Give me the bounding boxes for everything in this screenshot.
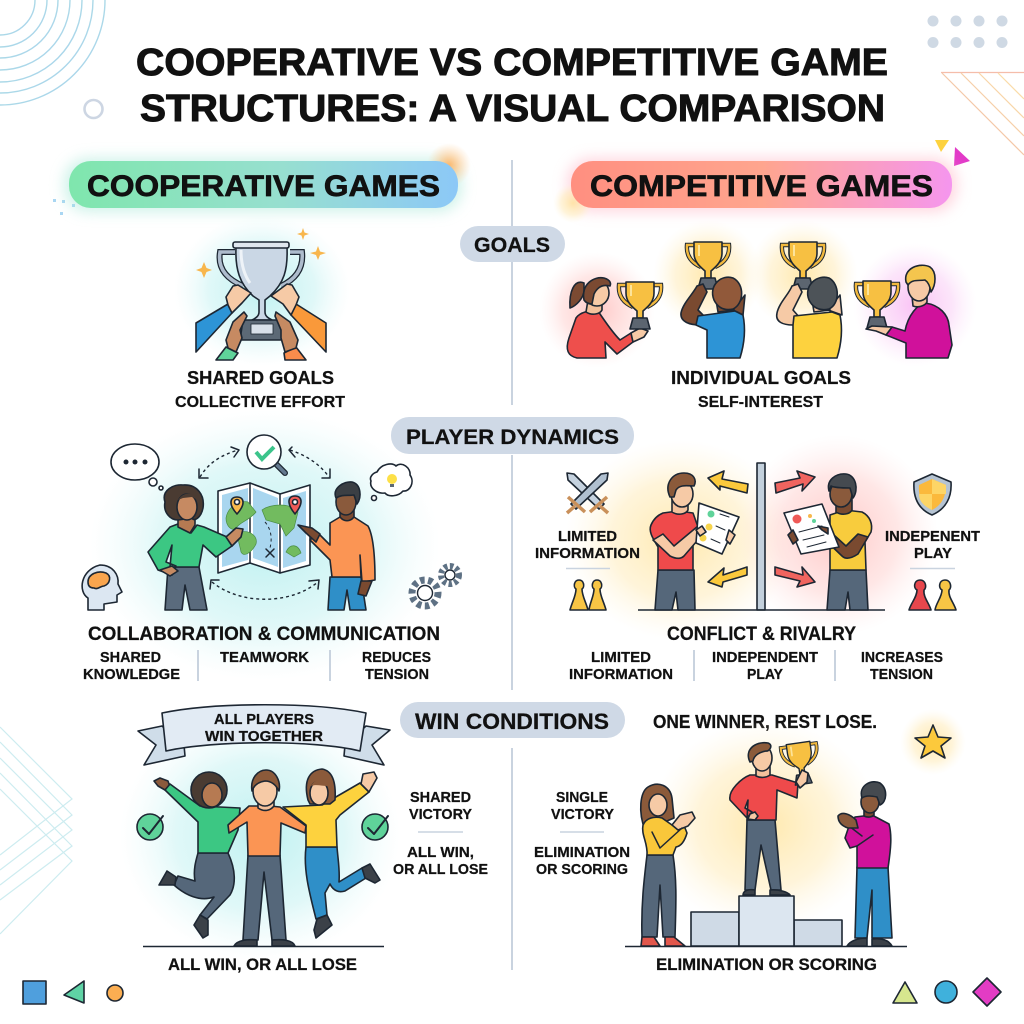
decoration: small triangles bbox=[935, 140, 970, 166]
figure: blond man in magenta with trophy bbox=[856, 265, 952, 358]
icon: star bbox=[900, 709, 966, 775]
icon: right check bbox=[362, 814, 388, 840]
pill: player dynamics: PLAYER DYNAMICS bbox=[406, 426, 619, 449]
text: independent play: INDEPENDENT bbox=[712, 649, 818, 666]
text: individual goals: SELF-INTEREST bbox=[698, 394, 823, 411]
podium bbox=[691, 896, 842, 946]
text: elimination or scoring: ELIMINATION OR SCORING bbox=[656, 956, 877, 974]
arrows: conflict bbox=[708, 471, 815, 587]
figure: left jumping woman bbox=[154, 772, 240, 938]
heading: cooperative games: COOPERATIVE GAMES bbox=[87, 170, 440, 203]
icon: speech bubble bbox=[111, 444, 163, 490]
text: all win or all lose: ALL WIN, OR ALL LOSE bbox=[168, 956, 357, 974]
icon: raised trophy bbox=[780, 741, 822, 786]
icon: yellow pawns bbox=[570, 580, 606, 610]
heading: competitive games: COMPETITIVE GAMES bbox=[590, 170, 933, 203]
text: side labels limited information bbox=[535, 528, 640, 568]
illustration: conflict bbox=[565, 435, 956, 640]
text: limited information bbox=[569, 649, 673, 683]
text: collaboration & communication: COLLABORATION & COMMUNICATION bbox=[88, 624, 440, 645]
heading: cooperative games bbox=[64, 143, 471, 212]
icon: left check bbox=[137, 814, 163, 840]
banner bbox=[138, 705, 390, 765]
text: single victory side labels: VICTORY bbox=[551, 806, 614, 823]
heading: competitive games bbox=[553, 158, 957, 223]
decoration: diagonal lines bbox=[941, 72, 1024, 155]
illustration: individual goals bbox=[539, 220, 977, 368]
text: conflict & rivalry bbox=[569, 624, 943, 683]
text: shared victory side labels: ALL WIN, bbox=[407, 844, 474, 861]
text: reduces tension: REDUCES bbox=[362, 649, 431, 666]
figure: clapping man bbox=[838, 782, 892, 946]
text: side labels independent play: PLAY bbox=[914, 545, 952, 562]
icon: crossed swords bbox=[567, 473, 608, 513]
title: COOPERATIVE VS COMPETITIVE GAME bbox=[136, 42, 888, 84]
text: shared victory side labels: SHARED bbox=[410, 789, 471, 806]
text: shared goals: COLLECTIVE EFFORT bbox=[175, 394, 345, 411]
text: individual goals bbox=[671, 368, 851, 411]
text: side labels limited information: INFORMATION bbox=[535, 545, 640, 562]
icon: orange arm bbox=[291, 304, 326, 352]
icon: red and yellow pawns bbox=[909, 580, 956, 610]
icon: shield bbox=[914, 474, 951, 515]
figure: man in orange bbox=[298, 482, 375, 610]
illustration: collaboration bbox=[82, 410, 459, 680]
illustration: all players win bbox=[120, 705, 400, 960]
text: side labels independent play: INDEPENENT bbox=[885, 528, 980, 545]
pill: win conditions: WIN CONDITIONS bbox=[415, 709, 609, 734]
decoration: faint dots bbox=[53, 199, 75, 215]
text: shared knowledge: SHARED bbox=[100, 649, 161, 666]
pill: player dynamics bbox=[391, 417, 634, 454]
icon: paper bbox=[696, 503, 739, 554]
figure: clapping woman bbox=[641, 784, 695, 946]
text: increases tension bbox=[861, 649, 943, 683]
text: shared knowledge bbox=[83, 649, 180, 683]
figure: winner bbox=[730, 741, 822, 895]
decoration: dot grid bbox=[928, 16, 1008, 48]
figure: woman in red with trophy bbox=[567, 278, 661, 358]
icon: orange sleeve bbox=[284, 347, 306, 360]
figure: man in yellow reading bbox=[784, 474, 872, 610]
banner: WIN TOGETHER bbox=[205, 728, 323, 745]
banner: ALL PLAYERS bbox=[214, 711, 314, 728]
icon: brain head bbox=[82, 565, 122, 610]
text: limited information: LIMITED bbox=[591, 649, 651, 666]
icon: blue arm bbox=[196, 304, 232, 352]
icon: hands bbox=[226, 284, 299, 352]
ground line bbox=[638, 609, 885, 611]
text: side labels limited information: LIMITED bbox=[558, 528, 617, 545]
decoration: chevron lines bbox=[0, 727, 72, 934]
decoration: corner arcs bbox=[0, 0, 105, 105]
text: limited information: INFORMATION bbox=[569, 666, 673, 683]
icon: magnifier with check bbox=[247, 435, 285, 473]
figure: man in red reading bbox=[650, 473, 739, 610]
pill: goals bbox=[460, 226, 565, 262]
text: shared goals bbox=[175, 368, 345, 411]
decoration: ring bbox=[84, 100, 102, 118]
text: single victory side labels: OR SCORING bbox=[536, 861, 628, 878]
text: independent play: PLAY bbox=[747, 666, 783, 683]
pill: goals: GOALS bbox=[474, 234, 550, 257]
text: single victory side labels bbox=[534, 789, 630, 878]
icon: gears bbox=[412, 566, 459, 606]
text: reduces tension: TENSION bbox=[365, 666, 429, 683]
figure: center man bbox=[228, 770, 306, 946]
text: conflict & rivalry: CONFLICT & RIVALRY bbox=[667, 624, 856, 645]
icon: paper bbox=[784, 504, 839, 554]
icon: sparkles bbox=[196, 228, 326, 278]
figure: man in blue with raised trophy bbox=[681, 242, 745, 358]
text: single victory side labels: SINGLE bbox=[556, 789, 608, 806]
text: reduces tension bbox=[362, 649, 431, 683]
text: one winner rest lose: ONE WINNER, REST LOSE. bbox=[653, 712, 877, 732]
text: increases tension: TENSION bbox=[870, 666, 933, 683]
title: STRUCTURES: A VISUAL COMPARISON bbox=[140, 88, 885, 130]
text: shared victory side labels: VICTORY bbox=[409, 806, 472, 823]
text: individual goals: INDIVIDUAL GOALS bbox=[671, 368, 851, 388]
text: shared goals: SHARED GOALS bbox=[187, 368, 334, 388]
pill: win conditions bbox=[400, 702, 625, 738]
arrows: dashed cycle bbox=[199, 447, 330, 599]
illustration: shared trophy bbox=[174, 214, 350, 366]
text: independent play bbox=[712, 649, 818, 683]
figure: right jumping woman bbox=[283, 769, 380, 938]
decoration: bottom-right shapes bbox=[893, 978, 1001, 1006]
text: teamwork: TEAMWORK bbox=[220, 649, 309, 666]
text: side labels independent play bbox=[885, 528, 980, 568]
ground line bbox=[143, 946, 384, 948]
icon: wall bbox=[757, 463, 765, 610]
title bbox=[136, 42, 888, 130]
ground line bbox=[625, 946, 907, 948]
icon: map bbox=[218, 483, 310, 573]
text: single victory side labels: ELIMINATION bbox=[534, 844, 630, 861]
text: shared victory side labels bbox=[393, 789, 488, 878]
icon: silver trophy bbox=[220, 242, 302, 340]
illustration: podium winner bbox=[625, 720, 907, 946]
center divider bbox=[511, 160, 513, 970]
text: increases tension: INCREASES bbox=[861, 649, 943, 666]
figure: woman in green bbox=[148, 485, 243, 610]
figure: man in yellow with raised trophy bbox=[777, 242, 842, 358]
icon: thought cloud with bulb bbox=[370, 464, 412, 500]
text: shared victory side labels: OR ALL LOSE bbox=[393, 861, 488, 878]
text: collaboration & communication bbox=[83, 624, 440, 683]
decoration: bottom-left shapes bbox=[23, 981, 123, 1004]
text: shared knowledge: KNOWLEDGE bbox=[83, 666, 180, 683]
icon: green sleeve bbox=[216, 347, 238, 360]
